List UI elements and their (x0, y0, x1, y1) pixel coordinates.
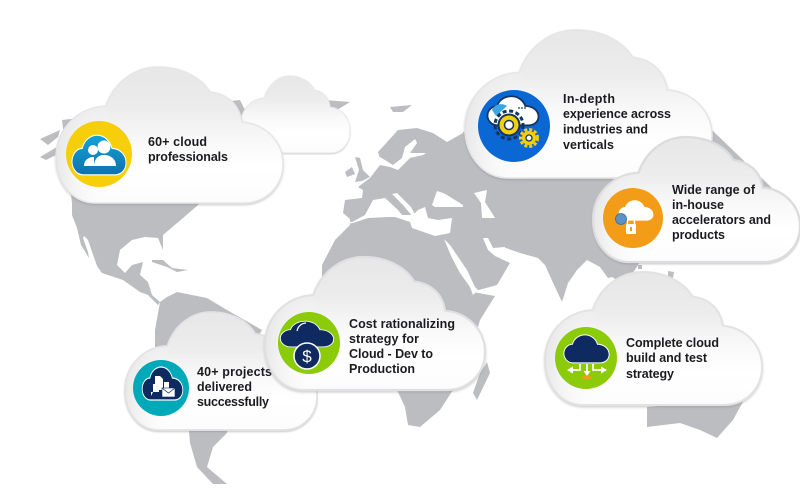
cloud shape (465, 30, 712, 178)
adriatic sea (392, 193, 417, 218)
black sea (432, 191, 463, 207)
text: cost rationalizing: Production (349, 362, 415, 376)
cloud shape (265, 257, 485, 390)
caspian sea (474, 190, 495, 218)
madagascar (473, 362, 490, 400)
cloud: 40+ projects (125, 312, 317, 430)
icon: cloud with dollar: $ (302, 347, 312, 366)
cloud shape (56, 67, 283, 203)
seas (345, 128, 505, 295)
australia (647, 398, 745, 438)
text: 40+ projects: successfully (197, 395, 269, 409)
cloud: wide range of accelerators (593, 137, 800, 262)
text: 60+ cloud professionals: professionals (148, 150, 228, 164)
text: cost rationalizing: Cost rationalizing (349, 317, 455, 331)
indonesia islands (638, 265, 674, 278)
icon: documents in cloud (133, 360, 189, 416)
north america (62, 100, 260, 305)
cloud shape (593, 137, 800, 262)
baltic sea (380, 139, 426, 170)
cuba (152, 260, 188, 272)
text: 40+ projects: 40+ projects (197, 365, 272, 379)
text: complete cloud: strategy (626, 367, 674, 381)
icon: cloud with dollar (278, 312, 340, 374)
icon: cloud with arrows (555, 327, 617, 389)
iceland (390, 105, 412, 112)
text: cost rationalizing: Cloud - Dev to (349, 347, 433, 361)
text: 40+ projects: delivered (197, 380, 252, 394)
text: cost rationalizing: strategy for (349, 332, 419, 346)
red sea (444, 239, 478, 295)
text: in-depth experience: verticals (563, 138, 614, 152)
text: wide range: products (672, 228, 725, 242)
text: 60+ cloud professionals: 60+ cloud (148, 135, 207, 149)
cloud: 60+ cloud professionals (56, 67, 283, 203)
alaska fragments (40, 130, 60, 160)
text: in-depth experience: industries and (563, 122, 648, 136)
south america (155, 292, 262, 484)
cloud: cost rationalizing (265, 257, 485, 390)
mediterranean sea (345, 198, 452, 236)
icon: cloud with lock (603, 188, 663, 248)
text: wide range: Wide range of (672, 183, 756, 197)
cloud: in-depth experience (465, 30, 712, 178)
world map (40, 100, 772, 484)
text: complete cloud: Complete cloud (626, 336, 719, 350)
ireland (345, 167, 355, 177)
cloud shape (545, 272, 762, 405)
greenland (325, 100, 350, 110)
cloud shape (125, 312, 317, 430)
text: wide range: in-house (672, 198, 724, 212)
background cloud (240, 76, 350, 153)
persian gulf (483, 238, 505, 256)
united kingdom (355, 157, 370, 182)
text: in-depth experience: experience across (563, 107, 671, 121)
eurasia and africa (322, 120, 772, 427)
icon: cloud with gears (478, 90, 550, 162)
cloud: complete cloud build (545, 272, 762, 405)
white sea (433, 128, 463, 142)
text: wide range: accelerators and (672, 213, 771, 227)
text: complete cloud: build and test (626, 351, 708, 365)
text: in-depth experience: In-depth (563, 92, 615, 106)
icon: people in cloud (66, 121, 132, 187)
